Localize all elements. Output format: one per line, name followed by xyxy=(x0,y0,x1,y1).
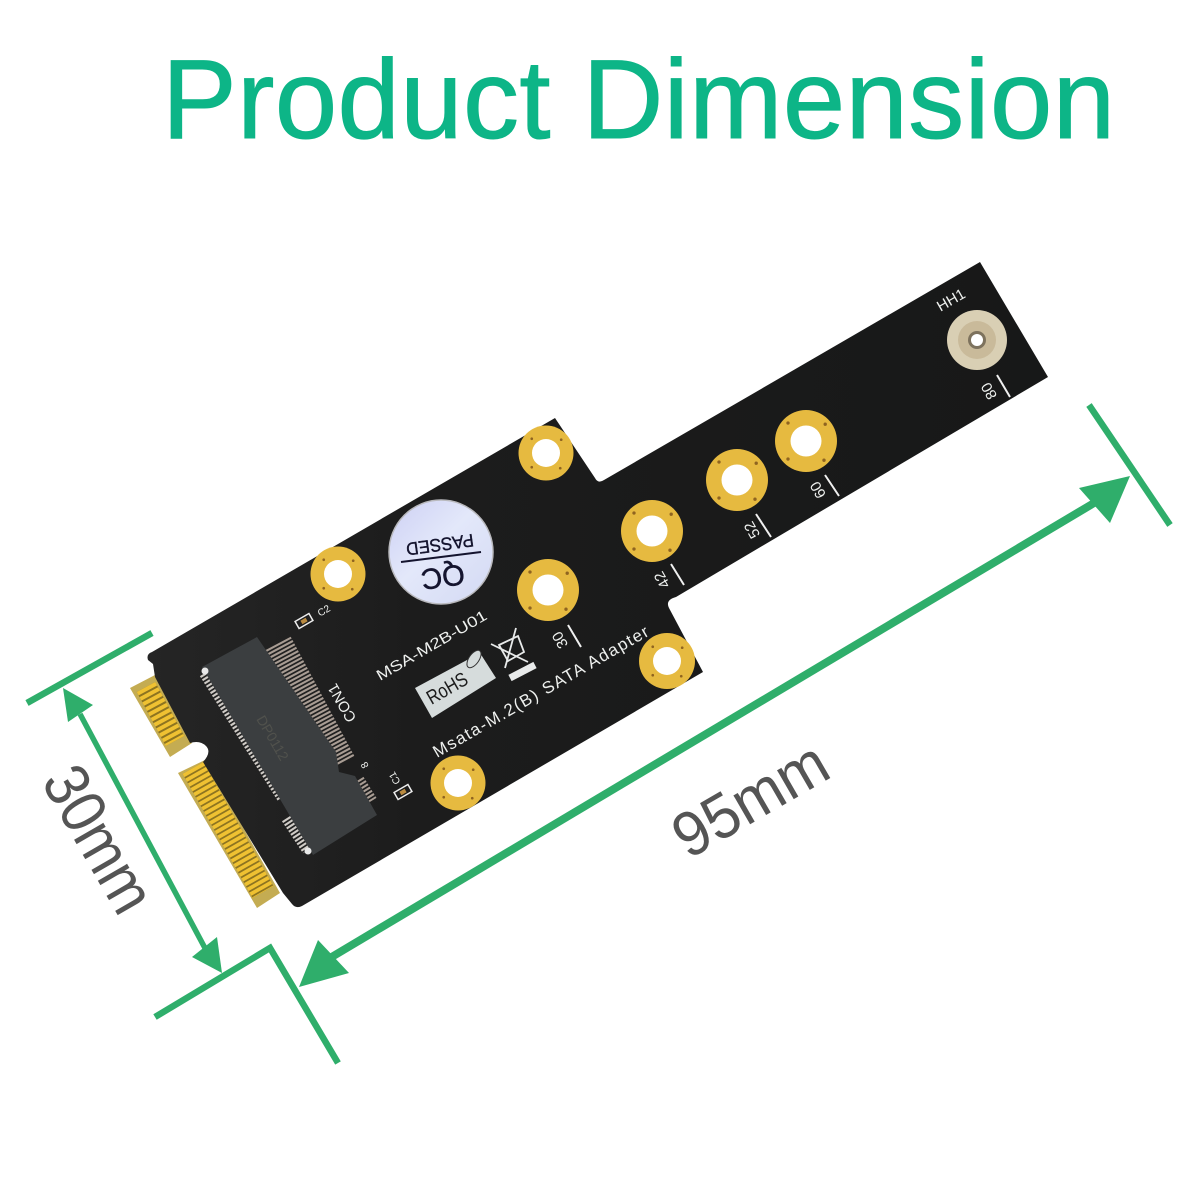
label 80: 80 xyxy=(978,379,1001,402)
connector end contacts xyxy=(202,668,312,854)
connector housing xyxy=(202,637,377,855)
pad C1 side xyxy=(430,756,486,810)
hole position labels xyxy=(316,286,1001,786)
label 42: 42 xyxy=(651,568,674,591)
brass standoff HH1 xyxy=(947,310,1007,370)
label HH1: HH1 xyxy=(934,286,968,315)
gold fingers xyxy=(146,687,263,892)
pad 42 xyxy=(621,500,683,562)
30mm top tick xyxy=(27,633,152,703)
30mm label: 30mm xyxy=(28,753,170,925)
connector molded marking: DP0112 xyxy=(253,712,292,764)
mounting pads xyxy=(310,410,837,810)
dimension: 95mm length xyxy=(155,405,1170,1063)
label 52: 52 xyxy=(741,518,764,541)
pad C2 side xyxy=(310,546,366,602)
sticker rule xyxy=(401,552,481,562)
gold finger substrate xyxy=(130,675,280,908)
RoHS label xyxy=(415,648,496,718)
pad top xyxy=(518,426,574,480)
title: Product Dimension xyxy=(162,37,1115,162)
label 30: 30 xyxy=(549,628,572,651)
sticker PASSED text: PASSED xyxy=(405,530,475,559)
model number: MSA-M2B-U01 xyxy=(374,607,490,684)
pad 52 xyxy=(706,449,768,511)
CON1 silkscreen: CON1 xyxy=(325,680,360,725)
circuit board outline xyxy=(148,262,1048,907)
label C1: C1 xyxy=(387,769,403,786)
95mm shared corner tick xyxy=(155,948,338,1063)
RoHS label: RoHS xyxy=(423,668,472,709)
capacitor C2 xyxy=(295,614,313,628)
connector long pin row xyxy=(277,644,341,764)
pad 30 xyxy=(517,559,579,621)
pad lower right xyxy=(639,633,695,689)
label pin 8: 8 xyxy=(359,759,372,770)
connector short pin row xyxy=(287,818,308,850)
adapter board xyxy=(130,262,1048,908)
capacitor C1 xyxy=(394,785,412,799)
connector outer pin row xyxy=(205,673,283,798)
RoHS leaf xyxy=(464,648,484,670)
95mm label: 95mm xyxy=(660,728,841,872)
product name: Msata-M.2(B) SATA Adapter xyxy=(430,622,652,761)
M.2 connector xyxy=(202,637,377,855)
pad 60 xyxy=(775,410,837,472)
30mm arrow xyxy=(63,688,222,973)
gold finger separators xyxy=(146,687,263,892)
label C2: C2 xyxy=(316,603,333,619)
connector key pin row xyxy=(352,784,365,805)
95mm arrow xyxy=(299,476,1130,987)
WEEE bin symbol xyxy=(491,628,535,678)
hole position tick marks xyxy=(568,375,1010,647)
dimension: 30mm width xyxy=(27,633,222,973)
sticker QC text: QC xyxy=(419,557,467,595)
QC passed sticker xyxy=(389,500,493,604)
label 60: 60 xyxy=(807,478,830,501)
95mm right tick xyxy=(1089,405,1170,525)
